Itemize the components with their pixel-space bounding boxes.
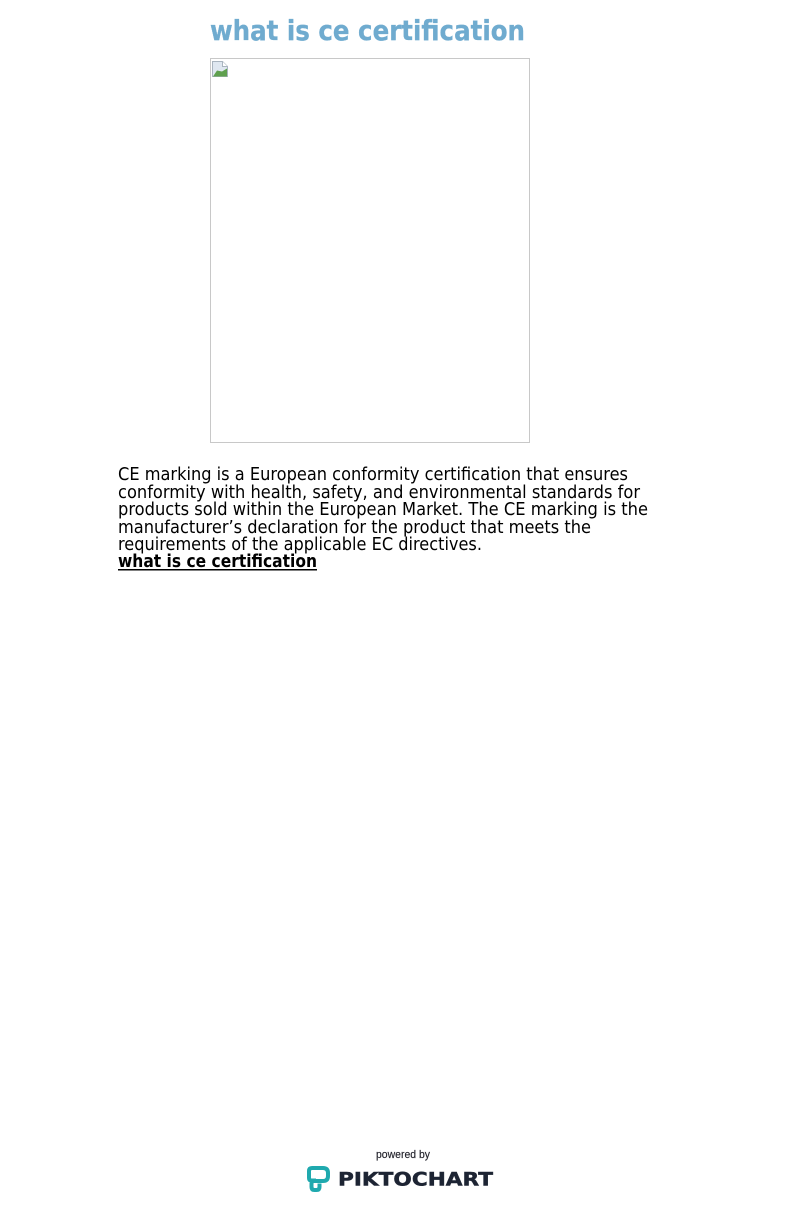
body text block: requirements of the applicable EC directives. <box>118 535 482 555</box>
broken image placeholder <box>210 58 530 442</box>
body text block <box>118 465 648 555</box>
icon: Piktochart logo <box>309 1168 328 1190</box>
body text block: conformity with health, safety, and environmental standards for <box>118 483 641 503</box>
body text block: manufacturer’s declaration for the product that meets the <box>118 518 591 538</box>
powered by label: powered by <box>376 1149 430 1161</box>
body text block: CE marking is a European conformity certification that ensures <box>118 465 628 485</box>
title: what is ce certification <box>210 14 525 47</box>
logo wordmark: PIKTOCHART <box>338 1168 493 1190</box>
icon: broken image <box>212 62 228 76</box>
link text: what is ce certification <box>118 552 317 572</box>
body text block: products sold within the European Market. The CE marking is the <box>118 500 648 520</box>
footer: powered by Piktochart <box>309 1149 493 1190</box>
